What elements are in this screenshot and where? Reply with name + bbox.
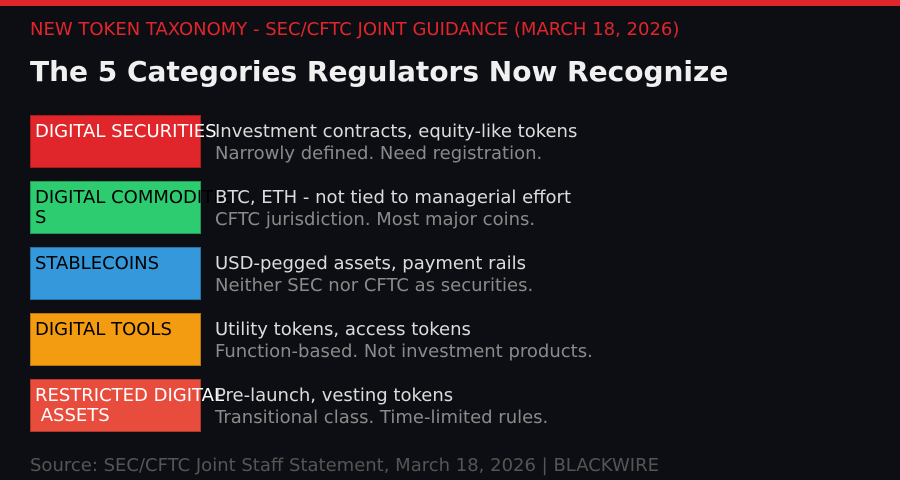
description: digital securities: Investment contracts, equity-like tokens: [215, 121, 577, 142]
row: digital tools: Function-based. Not investment products.: [215, 341, 593, 362]
row: digital commodities: [30, 181, 571, 234]
label box: digital securities: [30, 115, 201, 168]
row: digital securities: Narrowly defined. Need registration.: [215, 143, 542, 164]
title: The 5 Categories Regulators Now Recognize: [30, 55, 728, 88]
label box: digital commodities: [30, 181, 201, 234]
label box: digital commodities: DIGITAL COMMODITIE S: [35, 187, 230, 228]
top accent bar: [0, 0, 900, 6]
source footer: Source: SEC/CFTC Joint Staff Statement, March 18, 2026 | BLACKWIRE: [30, 455, 659, 476]
row: digital tools: [30, 313, 593, 366]
row: digital commodities: CFTC jurisdiction. Most major coins.: [215, 209, 535, 230]
label box: digital securities: DIGITAL SECURITIES: [35, 121, 217, 142]
subtitle header: NEW TOKEN TAXONOMY - SEC/CFTC JOINT GUIDANCE (MARCH 18, 2026): [30, 19, 679, 40]
row: stablecoins: [30, 247, 533, 300]
description: restricted digital assets: Pre-launch, vesting tokens: [215, 385, 453, 406]
label box: stablecoins: STABLECOINS: [35, 253, 159, 274]
row: digital securities: [30, 115, 577, 168]
row: stablecoins: Neither SEC nor CFTC as securities.: [215, 275, 533, 296]
description: digital commodities: BTC, ETH - not tied to managerial effort: [215, 187, 571, 208]
label box: stablecoins: [30, 247, 201, 300]
label box: restricted digital assets: RESTRICTED DIGITAL ASSETS: [35, 385, 224, 426]
description: digital tools: Utility tokens, access tokens: [215, 319, 471, 340]
row: restricted digital assets: Transitional class. Time-limited rules.: [215, 407, 548, 428]
label box: restricted digital assets: [30, 379, 201, 432]
label box: digital tools: [30, 313, 201, 366]
label box: digital tools: DIGITAL TOOLS: [35, 319, 172, 340]
row: restricted digital assets: [30, 379, 548, 432]
description: stablecoins: USD-pegged assets, payment rails: [215, 253, 526, 274]
